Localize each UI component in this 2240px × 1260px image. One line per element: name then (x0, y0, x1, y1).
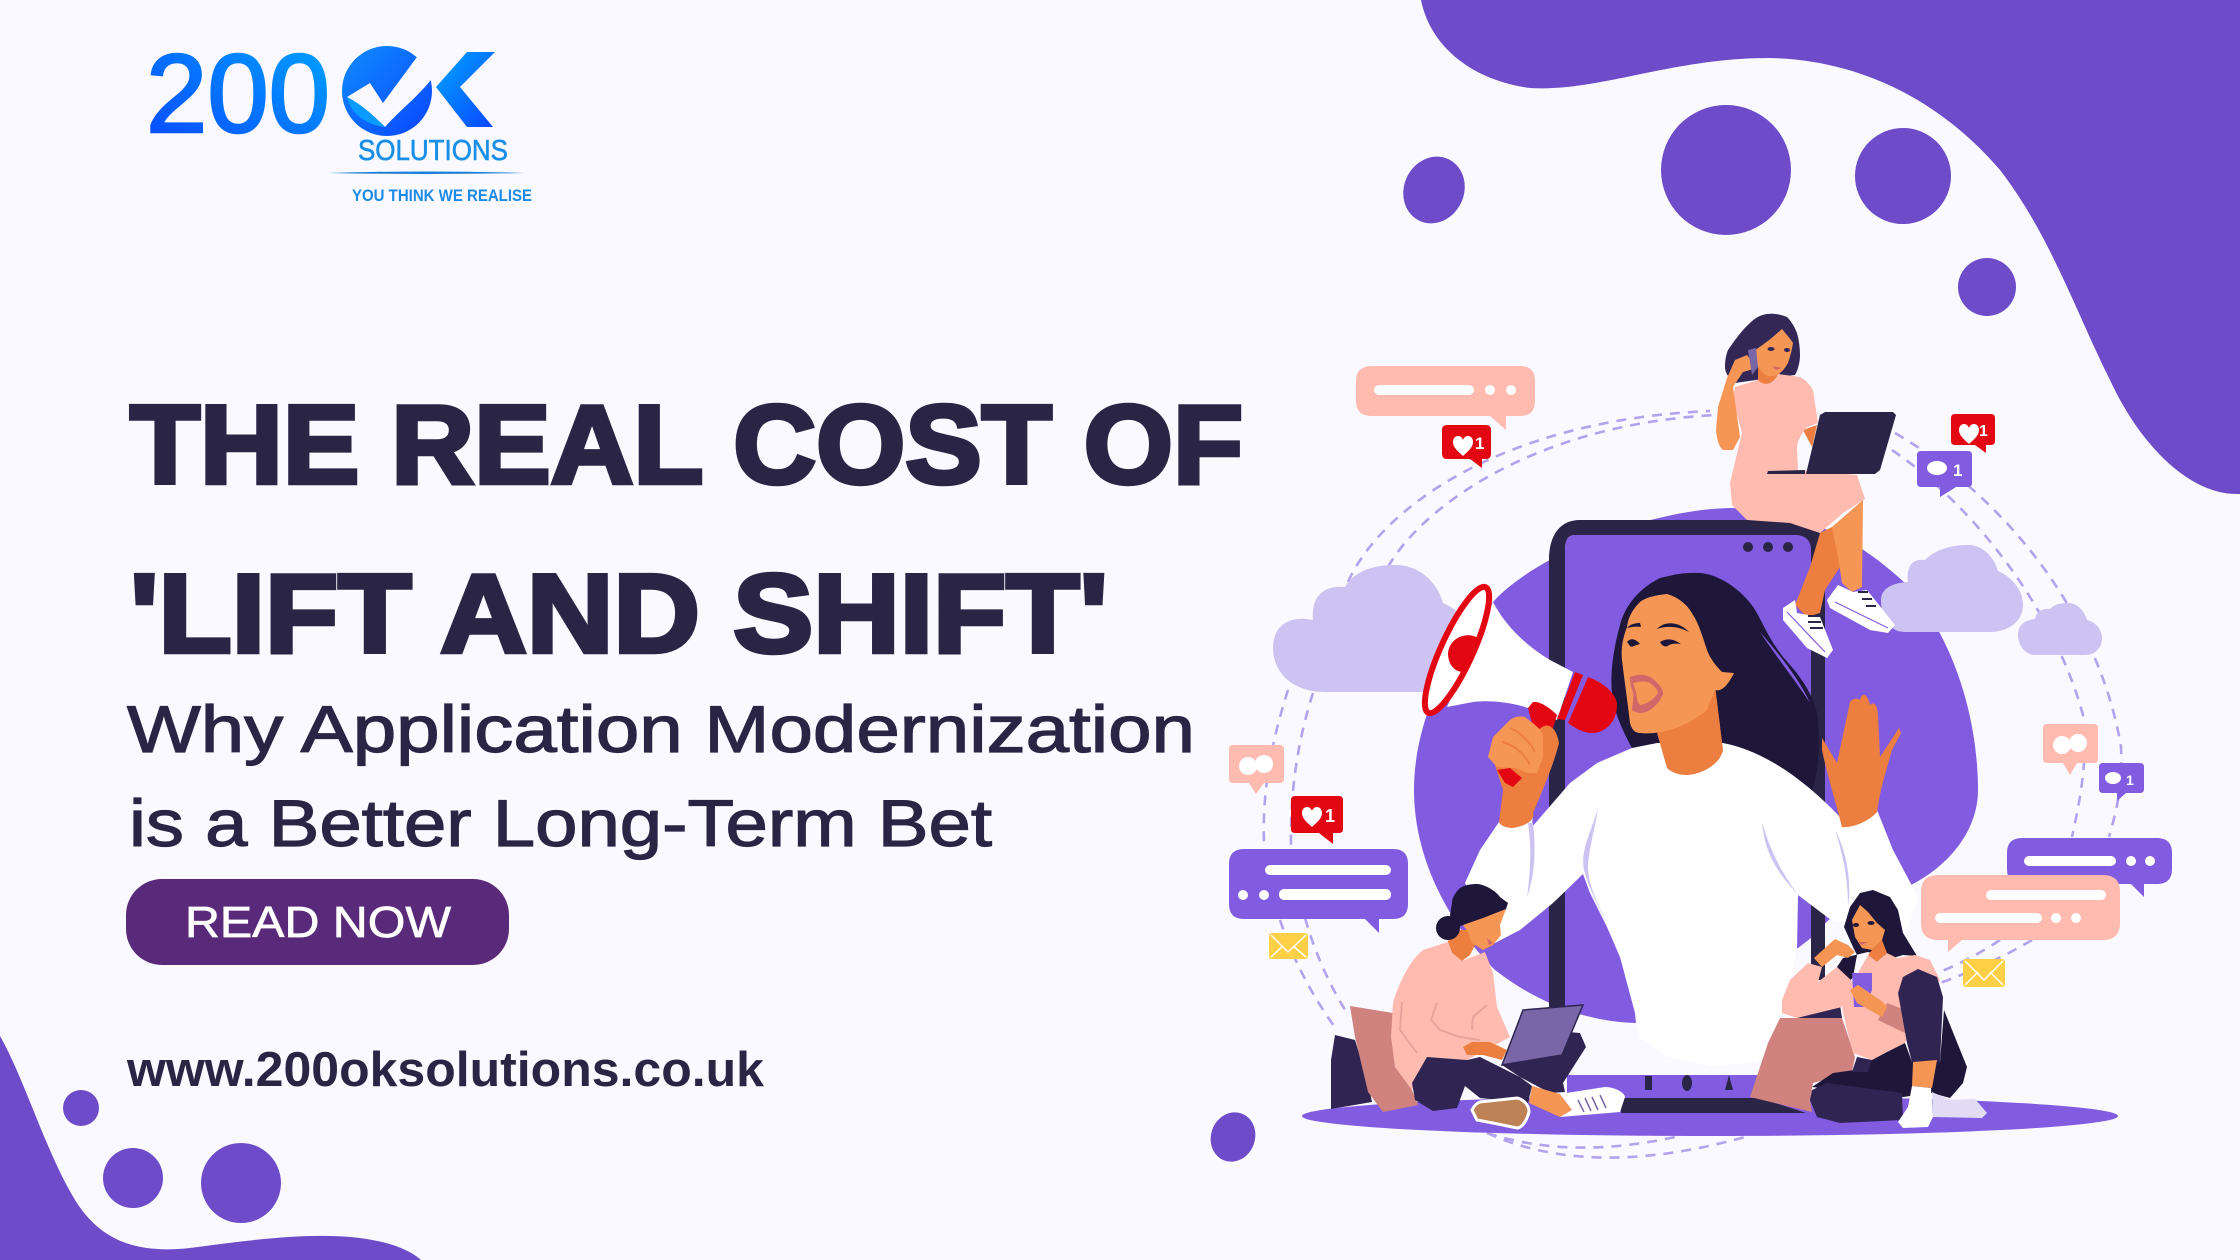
decorative circles: bottom left (63, 1090, 1262, 1223)
sweater (1391, 942, 1510, 1090)
face details (1853, 921, 1874, 945)
subtitle (127, 692, 1195, 860)
logo tagline: YOU THINK WE REALISE (352, 187, 532, 205)
pink cushion (1350, 1006, 1418, 1112)
megaphone rear band (1557, 672, 1583, 720)
title (130, 383, 1243, 676)
dark cushion (1331, 1035, 1372, 1109)
hair (1611, 573, 1819, 790)
dashed connection arcs (1264, 411, 2121, 1158)
smile (1487, 938, 1493, 945)
neck (1868, 940, 1887, 962)
hair (1837, 890, 1917, 985)
phone base (1567, 1075, 1770, 1098)
woman sitting right with phone (1750, 875, 2120, 1128)
lavender foot (1932, 1092, 1987, 1118)
neck (1657, 685, 1723, 775)
speech bubble: pink right (1921, 875, 2120, 952)
face (1852, 905, 1885, 950)
badge: red heart top left (1442, 425, 1491, 468)
back dark (1812, 1010, 1967, 1098)
thigh (1412, 1057, 1532, 1111)
cone fill over ring (1448, 606, 1510, 705)
illustration: social media megaphone scene (1229, 314, 2172, 1158)
hair (1725, 314, 1800, 383)
bare leg (1529, 1086, 1572, 1117)
badge: pink comment right (2043, 724, 2098, 775)
badge: red heart top right (1951, 414, 1995, 453)
knee (1502, 1032, 1586, 1093)
torso underside (1852, 1057, 1872, 1072)
megaphone handle end (1497, 768, 1522, 787)
envelope left (1269, 933, 1308, 959)
title: 'LIFT AND SHIFT' (130, 552, 1108, 676)
megaphone handle (1528, 702, 1557, 735)
subtitle: is a Better Long-Term Bet (129, 786, 992, 860)
mouth (1630, 675, 1663, 713)
woman on top of phone with laptop (1716, 314, 1896, 658)
shoe sole (1472, 1098, 1529, 1128)
sweater fold lines (1527, 808, 1849, 945)
button: read now (126, 879, 509, 965)
badge: purple comment top right (1917, 451, 1972, 497)
logo text 200: 200 (146, 32, 330, 156)
arm far (1803, 425, 1817, 447)
clouds (1273, 545, 2102, 692)
face (1622, 594, 1734, 733)
megaphone red dot (1448, 635, 1478, 672)
badge: red heart lower left: 1 (1325, 806, 1335, 826)
badge: red heart top right: 1 (1979, 423, 1988, 440)
shoes (1783, 585, 1895, 658)
hand (1488, 716, 1543, 773)
decorative blob: top right (1421, 0, 2240, 494)
dress (1730, 374, 1865, 533)
subtitle: Why Application Modernization (127, 692, 1195, 766)
sock (1898, 1086, 1933, 1128)
megaphone rear (1568, 677, 1617, 733)
phone camera dots (1743, 542, 1793, 552)
forearm (1495, 725, 1559, 828)
megaphone cone (1447, 602, 1573, 720)
upper hand (1814, 939, 1855, 967)
shin (1912, 1060, 1937, 1088)
laptop (1767, 412, 1896, 474)
button: read now: READ NOW (185, 898, 452, 947)
dark cushion bit (1797, 1005, 1842, 1018)
big purple backdrop circle (1414, 508, 1978, 1023)
speech bubble: purple right (2007, 838, 2172, 897)
face (1463, 909, 1506, 950)
website url: www.200oksolutions.co.uk (126, 1043, 765, 1097)
badge: pink comment left (1229, 745, 1284, 794)
eyes and brows (1627, 623, 1689, 647)
logo check circle (342, 45, 445, 136)
phone (1549, 520, 1825, 1113)
white shoe (1560, 1087, 1625, 1117)
hair (1450, 884, 1508, 930)
bun (1436, 916, 1460, 940)
badge: purple comment right: 1 (2126, 772, 2134, 788)
face (1755, 329, 1793, 376)
phone screen (1565, 535, 1811, 1023)
face details (1768, 347, 1790, 370)
knee leg (1898, 969, 1943, 1062)
megaphone ring (1414, 581, 1500, 719)
decorative blob: bottom left (0, 1036, 421, 1260)
badge: red heart lower left (1291, 796, 1343, 844)
hand (1463, 1042, 1507, 1060)
neck (1758, 367, 1780, 387)
phone in hand (1852, 973, 1872, 1007)
speech bubble: purple left (1229, 849, 1408, 933)
hand (1850, 985, 1887, 1017)
neck (1448, 930, 1475, 961)
speech bubble: pink top (1356, 366, 1535, 430)
arm raised to ear (1716, 355, 1757, 450)
raised hand (1822, 695, 1901, 827)
laptop (1502, 1005, 1583, 1065)
sweater folds (1400, 1002, 1487, 1053)
main woman (1465, 573, 1918, 1066)
envelope right (1963, 959, 2005, 987)
woman sitting left with laptop (1331, 884, 1625, 1128)
badge: purple comment top right: 1 (1953, 461, 1962, 480)
logo letter K (436, 52, 495, 127)
logo: 200 OK Solutions (146, 32, 532, 205)
white sweater (1465, 743, 1918, 1066)
logo word SOLUTIONS: SOLUTIONS (358, 135, 508, 167)
ground ellipse (1302, 1096, 2118, 1136)
sleeve shade (1878, 1003, 1905, 1033)
sweater (1782, 953, 1940, 1060)
badge: red heart top left: 1 (1475, 434, 1484, 453)
megaphone and arm (1414, 581, 1617, 828)
phone at ear (1748, 348, 1758, 375)
lower leg (1810, 1083, 1903, 1123)
lower leg (1795, 527, 1840, 617)
decorative circles: top right (1392, 105, 2016, 316)
pillow (1750, 1018, 1855, 1112)
badge: purple comment right (2099, 763, 2144, 801)
phone frame (1549, 520, 1825, 1008)
upper leg (1832, 500, 1863, 592)
title: THE REAL COST OF (130, 383, 1243, 507)
